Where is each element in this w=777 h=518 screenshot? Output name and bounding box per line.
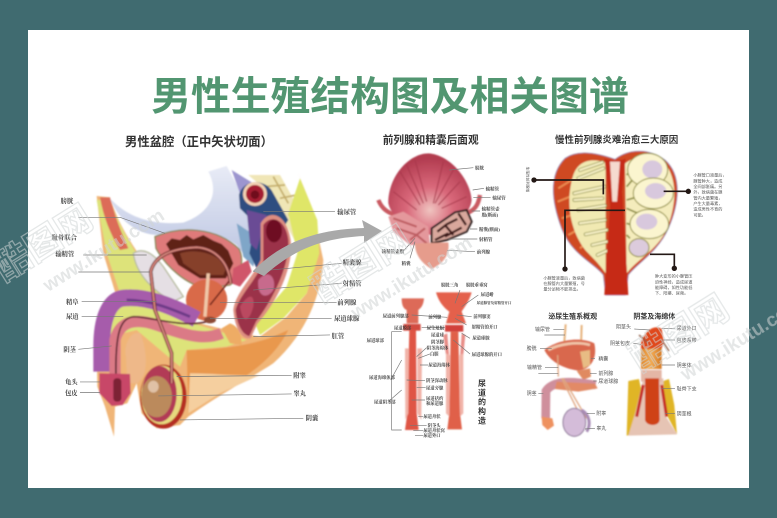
caption: right: 小腺管口液量后， <box>693 172 727 178</box>
labels: overview: 输精管 <box>527 364 542 371</box>
labels: urethra: 尿道球部 <box>367 337 385 344</box>
labels: urethra: 尿道海绵体 <box>428 362 451 369</box>
labels: pelvis left: 阴茎 <box>63 345 78 354</box>
labels: overview: 膀胱 <box>527 345 537 352</box>
caption: lower left <box>543 274 585 292</box>
caption: right: 腺管肿大，造成 <box>693 177 722 183</box>
labels: overview: 阴茎 <box>527 390 537 397</box>
vertical heading: urethra structure: 构 <box>478 406 486 416</box>
labels: pelvis left: 包皮 <box>65 388 78 397</box>
caption: lower right: 能障碍，如性功能低 <box>655 284 692 290</box>
labels: rear view <box>382 164 506 267</box>
labels: pelvis right: 阴囊 <box>306 413 319 422</box>
caption: right: 产生大量毒素， <box>693 200 722 206</box>
labels: pelvis right: 输尿管 <box>337 207 357 216</box>
watermark middle: 酷图网 <box>305 218 418 310</box>
caption: right: 全间部胀痛。另 <box>693 183 722 189</box>
illustration: right urethra column <box>436 292 472 429</box>
labels: overview: 前列腺 <box>598 370 613 377</box>
vertical heading: urethra structure: 道 <box>478 387 486 397</box>
labels: overview: 附睾 <box>596 410 606 417</box>
caption: lower right <box>655 273 692 296</box>
labels: urethra <box>367 282 512 439</box>
labels: overview <box>527 326 618 432</box>
labels: urethra: 尿道阴茎部 <box>374 398 396 405</box>
labels: rear view: 精囊(断面) <box>479 226 500 233</box>
heading: rear view: 前列腺和精囊后面观 <box>383 133 479 146</box>
labels: rear view: 输精管壶 <box>482 205 500 212</box>
caption: lower right: 迫性神经，造成尿道 <box>655 278 692 284</box>
labels: pelvis left <box>52 196 79 397</box>
labels: pelvis left: 耻骨联合 <box>52 233 78 242</box>
labels: rear view: 膀胱 <box>475 164 484 171</box>
watermark middle: www.ikutu.com <box>347 233 476 324</box>
watermark left: www.ikutu.com <box>39 205 168 297</box>
heading: pelvis: 男性盆腔（正中矢状切面） <box>125 134 273 149</box>
labels: rear view: 腹(断面) <box>482 211 499 218</box>
labels: urethra: 尿道旁腺 <box>426 384 444 391</box>
labels: rear view: 输精管 <box>486 185 500 192</box>
caption: right: 外，致病菌在腺 <box>693 189 723 195</box>
leader lines: penis <box>633 328 675 413</box>
caption: lower right: 肿大变形的小腺管压 <box>655 273 692 279</box>
labels: pelvis right: 射精管 <box>343 278 362 287</box>
labels: penis: 尿道外口 <box>677 325 697 332</box>
labels: urethra: 尿道前列腺部 <box>383 312 409 319</box>
labels: urethra: 尿道球腺 <box>472 334 490 341</box>
panel: three causes of chronic prostatitis <box>526 134 727 296</box>
labels: overview: 尿道球腺 <box>598 378 618 385</box>
panel: urethra structure <box>367 282 512 439</box>
caption: right: 可能。 <box>693 211 706 217</box>
labels: pelvis right <box>293 207 362 422</box>
caption: lower left: 小腺管液量后，致病菌 <box>543 274 585 280</box>
labels: overview: 精囊 <box>598 355 608 362</box>
illustration: urogenital organs <box>542 324 598 436</box>
labels: urethra: 阴茎脚 <box>431 338 445 345</box>
leader lines: pelvis <box>78 212 342 420</box>
watermark left <box>0 164 168 313</box>
vertical heading: urethra structure <box>478 379 486 425</box>
labels: pelvis left: 尿道 <box>66 312 79 321</box>
vertical heading: urethra structure: 尿 <box>478 379 486 388</box>
watermarks <box>0 164 777 403</box>
labels: rear view: 输尿管 <box>492 194 506 201</box>
arrow: pelvis to rear view <box>253 220 382 276</box>
panel: urogenital system overview <box>527 312 697 436</box>
caption: lower left: 量分泌物不能排出。 <box>543 286 581 292</box>
labels: penis: 阴茎根 <box>677 410 692 417</box>
watermark right <box>623 253 777 403</box>
labels: overview: 输尿管 <box>535 326 550 333</box>
labels: pelvis right: 尿道球腺 <box>334 313 360 322</box>
labels: pelvis left: 膀胱 <box>61 196 74 205</box>
caption: right: 造成男性不育的 <box>693 206 722 212</box>
labels: penis: 阴茎头 <box>616 323 631 330</box>
title: 男性生殖结构图及相关图谱 <box>151 75 629 119</box>
labels: urethra: 尿生殖膈 <box>427 324 445 331</box>
watermark middle <box>305 191 476 334</box>
labels: penis: 阴茎体 <box>677 362 692 369</box>
labels: pelvis right: 精囊腺 <box>343 257 362 266</box>
heading: penis and corpus cavernosum: 阴茎及海绵体 <box>633 312 675 321</box>
labels: urethra: 尿道舟状 <box>423 413 441 420</box>
labels: rear view: 精囊 <box>402 260 411 267</box>
labels: urethra: 和尿道腺 <box>426 400 444 407</box>
illustration: penis and corpus cavernosum <box>627 327 677 436</box>
leader lines: overview <box>538 329 597 429</box>
caption: right: 管内大量繁殖， <box>693 194 722 200</box>
labels: urethra: 尿道球腺的开口 <box>472 351 502 358</box>
labels: urethra: 白膜 <box>430 350 439 357</box>
labels: penis: 耻骨下支 <box>677 385 697 392</box>
labels: pelvis right: 前列腺 <box>337 298 357 307</box>
labels: urethra: 膀胱垂垂窝 <box>466 282 488 289</box>
labels: overview: 睾丸 <box>596 425 606 432</box>
labels: pelvis right: 肛管 <box>332 331 345 340</box>
labels: urethra: 射精管的开口 <box>472 323 498 330</box>
labels: urethra: 尿道括约 <box>426 395 444 402</box>
labels: urethra: 尿道膜部 <box>394 324 412 331</box>
labels: urethra: 尿道球 <box>431 332 445 339</box>
labels: pelvis left: 精阜 <box>66 297 79 306</box>
leader lines: rear view <box>403 168 491 258</box>
labels: pelvis left: 龟头 <box>65 377 78 386</box>
panel: prostate and seminal vesicle rear view <box>378 133 506 269</box>
labels: penis: 阴茎包皮 <box>610 340 630 347</box>
bracket: urethra sections <box>388 332 402 430</box>
labels: urethra: 阴茎深动脉 <box>426 377 448 384</box>
labels: rear view: 前列腺 <box>477 249 491 256</box>
vertical heading: urethra structure: 造 <box>478 415 486 425</box>
labels: urethra: 阴茎海绵体 <box>427 345 449 352</box>
illustration: left urethra column <box>402 298 424 430</box>
labels: pelvis right: 睾丸 <box>293 388 307 397</box>
labels: penis: 包皮系带 <box>677 337 697 344</box>
caption: right <box>693 172 727 217</box>
illustration: prostate heart-shaped section <box>553 151 677 295</box>
vertical heading: urethra structure: 的 <box>478 397 486 407</box>
illustration: bladder and seminal vesicles <box>378 153 480 269</box>
labels: urethra: 尿道海绵体部 <box>369 374 396 381</box>
heading: urogenital overview: 泌尿生殖系概观 <box>548 312 597 321</box>
labels: urethra: 前列腺 <box>428 314 442 321</box>
panel: male pelvis sagittal section <box>52 134 362 437</box>
labels: rear view: 输精管壶腹 <box>382 248 405 255</box>
labels: urethra: 尿道嵴 <box>481 291 494 298</box>
heading: causes: 慢性前列腺炎难治愈三大原因 <box>555 134 678 146</box>
watermark right: 酷图网 <box>623 287 736 379</box>
pointers: causes <box>534 180 688 269</box>
caption: lower left: 在腺管内大量繁殖，号 <box>543 280 585 286</box>
labels: urethra: 阴茎头 <box>428 422 441 429</box>
labels: pelvis right: 附睾 <box>293 371 307 380</box>
labels: urethra: 尿道外口 <box>423 432 441 439</box>
caption: vertical: 生殖性前列腺增 <box>526 167 531 193</box>
labels: penis <box>610 323 697 417</box>
labels: urethra: 前列腺窦 <box>473 313 491 320</box>
labels: urethra: 尿道腺管及射精管开口 <box>477 300 512 305</box>
leader lines: urethra <box>407 290 478 436</box>
anatomical illustration: pelvis <box>97 166 323 437</box>
labels: urethra: 尿道舟状窝 <box>423 427 446 434</box>
pointer dots: causes <box>531 177 691 272</box>
labels: pelvis left: 输精管 <box>55 249 75 258</box>
labels: urethra: 膀胱三角 <box>441 282 458 289</box>
caption: lower right: 下、阳痿、尿频。 <box>655 290 688 296</box>
labels: rear view: 射精管 <box>479 236 493 243</box>
